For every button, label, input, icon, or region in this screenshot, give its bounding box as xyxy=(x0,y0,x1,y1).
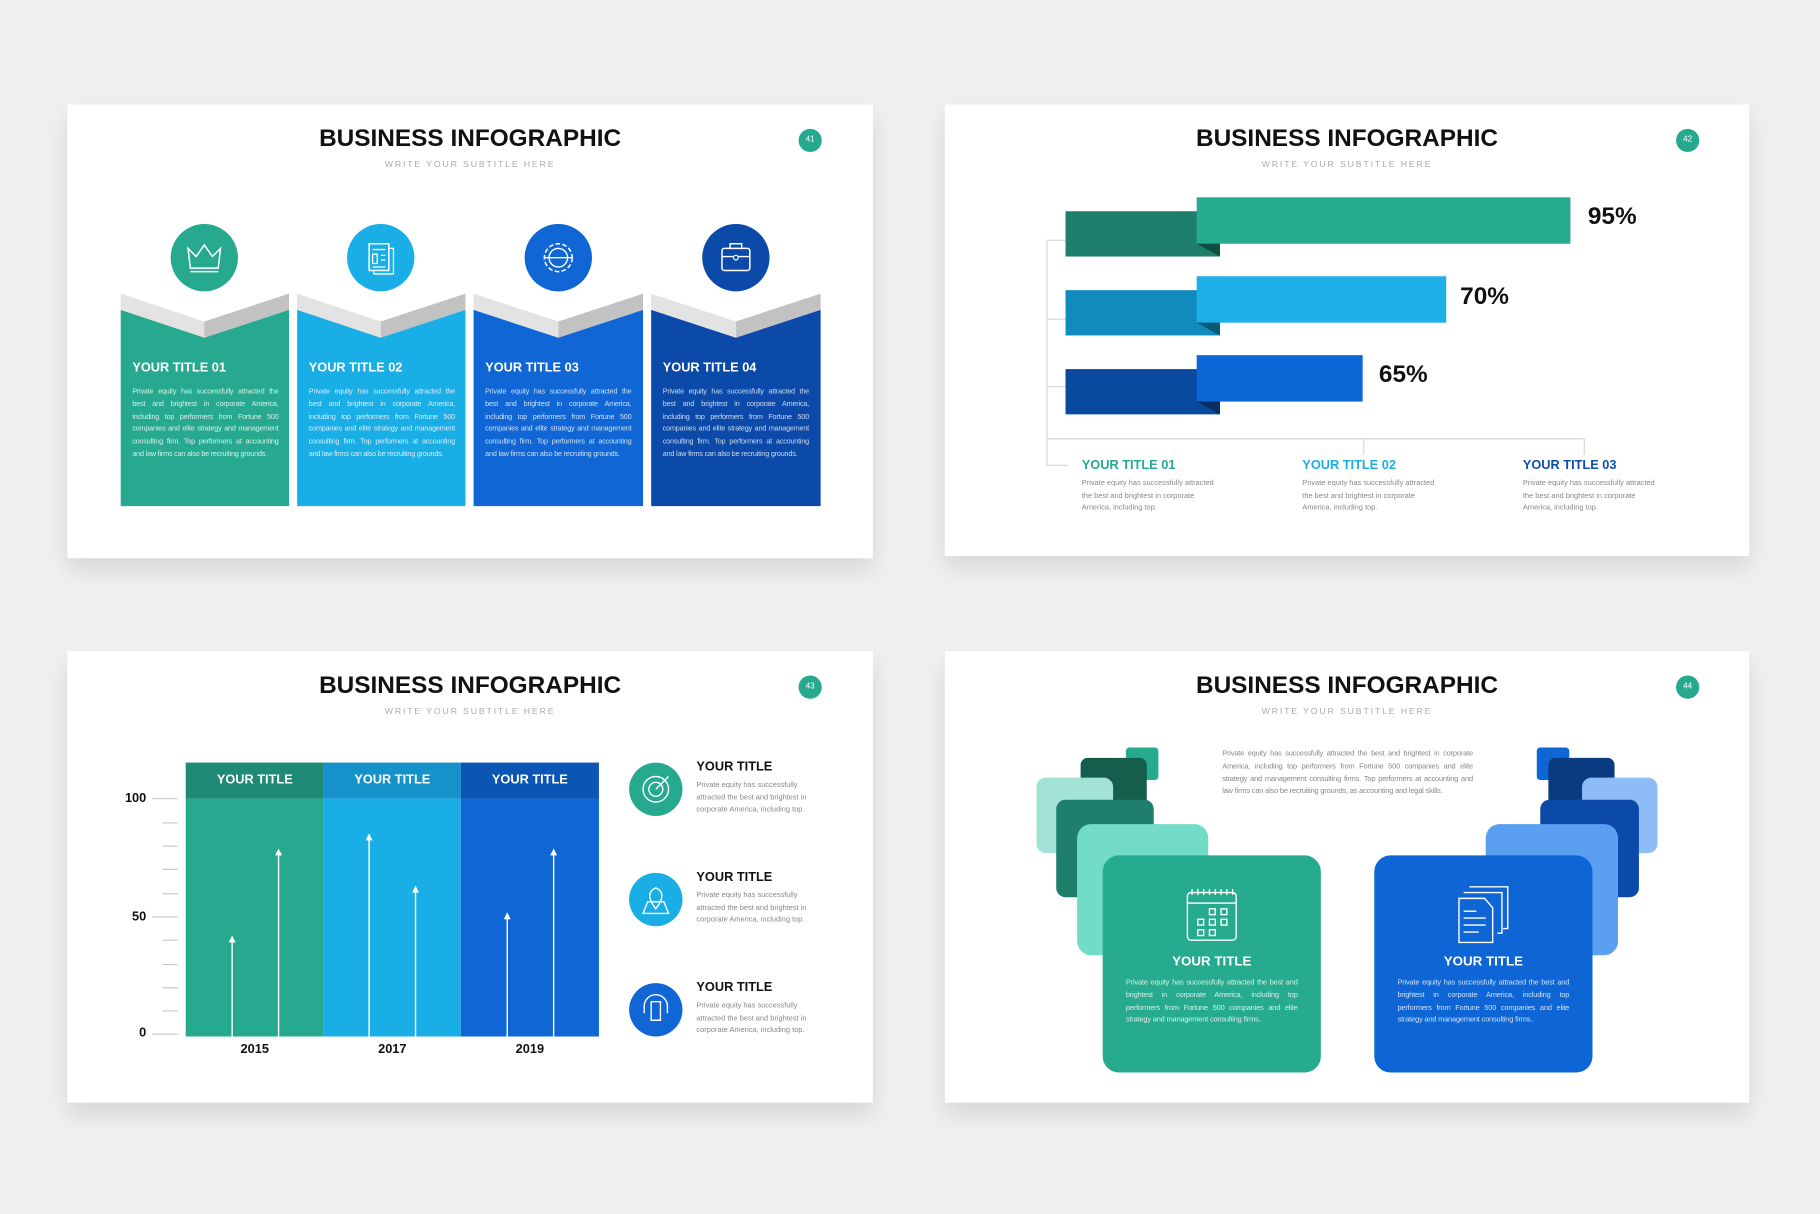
badge 44: 44 xyxy=(1683,682,1692,691)
axis labels: 0 xyxy=(139,1026,146,1040)
label 65: 65% xyxy=(1379,361,1428,388)
column 1 text: Private equity has successfully attracted the best and brightest in corporate America, including top performers from Fortune 500 companies and elite strategy and management consulting firm. Top performers at accounting and law firms can also be recruiting grounds. xyxy=(132,388,279,458)
legend item 3 xyxy=(1523,458,1655,512)
icon: headset xyxy=(629,983,682,1037)
icon: target xyxy=(629,763,682,816)
right card text xyxy=(1397,955,1570,1024)
legend item 1: YOUR TITLE 01 xyxy=(1082,458,1175,472)
icon: documents xyxy=(1459,887,1508,942)
header 3: YOUR TITLE xyxy=(492,773,568,787)
list item 2 xyxy=(696,871,807,924)
header 2: YOUR TITLE xyxy=(354,773,430,787)
icon: map pin xyxy=(629,873,682,926)
icon: calendar xyxy=(1187,889,1236,940)
axis labels: 100 xyxy=(125,792,146,806)
title: BUSINESS INFOGRAPHIC xyxy=(319,672,621,699)
right card text: YOUR TITLE xyxy=(1444,955,1523,969)
year labels: 2015 xyxy=(241,1042,269,1056)
column 2019 xyxy=(461,763,599,1037)
slide 4: stacked cards xyxy=(945,651,1749,1103)
column 3 text: Private equity has successfully attracted the best and brightest in corporate America, including top performers from Fortune 500 companies and elite strategy and management consulting firm. Top performers at accounting and law firms can also be recruiting grounds. xyxy=(485,388,631,458)
axis labels xyxy=(125,792,146,1040)
list item 3: YOUR TITLE xyxy=(696,981,772,995)
badge 42: 42 xyxy=(1683,136,1692,144)
left card text: YOUR TITLE xyxy=(1172,955,1251,969)
column 2 shape xyxy=(297,294,465,506)
list item 3 xyxy=(696,981,807,1034)
badge 43: 43 xyxy=(806,682,815,691)
badge 42 xyxy=(1676,129,1699,152)
column 2 text: Private equity has successfully attracted the best and brightest in corporate America, including top performers from Fortune 500 companies and elite strategy and management consulting firm. Top performers at accounting and law firms can also be recruiting grounds. xyxy=(309,388,455,458)
legend item 1 xyxy=(1082,458,1214,512)
icon: newspaper xyxy=(347,224,414,291)
badge 41 xyxy=(799,129,822,152)
legend item 2 xyxy=(1302,458,1434,512)
chart xyxy=(152,762,682,1036)
column 1 shape xyxy=(121,294,289,506)
subtitle: WRITE YOUR SUBTITLE HERE xyxy=(385,706,555,716)
badge 44 xyxy=(1676,676,1699,699)
label 70: 70% xyxy=(1460,283,1509,310)
right card text: Private equity has successfully attracted the best and brightest in corporate America, including top performers from Fortune 500 companies and elite strategy and management consulting firms.. xyxy=(1397,978,1569,1024)
bar 70% xyxy=(1066,276,1446,335)
column 3 shape xyxy=(474,294,643,506)
value labels: 95% xyxy=(1588,203,1637,230)
column 4 text: YOUR TITLE 04 xyxy=(663,361,756,375)
subtitle: WRITE YOUR SUBTITLE HERE xyxy=(1262,159,1432,169)
year labels: 2019 xyxy=(516,1042,544,1056)
title: BUSINESS INFOGRAPHIC xyxy=(1196,125,1498,152)
list item 2: Private equity has successfully attracted the best and brightest in corporate America, including top. xyxy=(696,891,807,924)
title: BUSINESS INFOGRAPHIC xyxy=(1196,672,1498,699)
card stack graphic xyxy=(1036,748,1658,1072)
intro paragraph: Private equity has successfully attracted the best and brightest in corporate America, including top performers from Fortune 500 companies and elite strategy and management consulting firms. Top performers at accounting and law firms can also be recruiting grounds, as accounting and legal skills. xyxy=(1222,750,1473,796)
legend item 2: Private equity has successfully attracted the best and brightest in corporate America, including top. xyxy=(1302,479,1434,512)
slide 1: four columns xyxy=(67,104,873,558)
list item 3: Private equity has successfully attracted the best and brightest in corporate America, including top. xyxy=(696,1002,807,1034)
list item 1: YOUR TITLE xyxy=(696,760,772,774)
icon: gear xyxy=(525,224,592,291)
legend item 2: YOUR TITLE 02 xyxy=(1302,458,1396,472)
column 3 text: YOUR TITLE 03 xyxy=(485,361,579,375)
column 4 shape xyxy=(651,294,821,506)
column 2 text: YOUR TITLE 02 xyxy=(309,361,402,375)
slide 3: column chart xyxy=(67,651,873,1103)
left stack xyxy=(1037,747,1321,1072)
list item 1 xyxy=(696,760,807,814)
column headers: YOUR TITLE xyxy=(217,773,293,787)
bar 65% xyxy=(1066,355,1363,414)
list item 2: YOUR TITLE xyxy=(696,871,772,884)
bar 95% xyxy=(1066,197,1570,257)
slide 2: bar chart xyxy=(945,104,1749,556)
icon: crown xyxy=(171,224,238,291)
legend item 3: Private equity has successfully attracted the best and brightest in corporate America, including top. xyxy=(1523,479,1655,512)
subtitle: WRITE YOUR SUBTITLE HERE xyxy=(1262,706,1432,716)
year labels: 2017 xyxy=(378,1042,407,1056)
list item 1: Private equity has successfully attracted the best and brightest in corporate America, including top. xyxy=(696,781,807,814)
legend item 1: Private equity has successfully attracted the best and brightest in corporate America, including top. xyxy=(1082,479,1214,512)
left card text xyxy=(1126,955,1298,1024)
legend item 3: YOUR TITLE 03 xyxy=(1523,458,1616,472)
icon: briefcase xyxy=(702,224,770,291)
subtitle: WRITE YOUR SUBTITLE HERE xyxy=(385,159,555,169)
year labels xyxy=(240,1042,544,1056)
bar chart xyxy=(1046,197,1585,466)
left card text: Private equity has successfully attracted the best and brightest in corporate America, including top performers from Fortune 500 companies and elite strategy and management consulting firms.. xyxy=(1126,978,1298,1024)
columns graphic xyxy=(120,224,821,506)
column 2017 xyxy=(324,763,461,1037)
right stack xyxy=(1374,747,1657,1072)
axis labels: 50 xyxy=(132,910,146,924)
column 4 text: Private equity has successfully attracted the best and brightest in corporate America, including top performers from Fortune 500 companies and elite strategy and management consulting firm. Top performers at accounting and law firms can also be recruiting grounds. xyxy=(663,388,809,458)
column 2015 xyxy=(186,763,324,1037)
badge 41: 41 xyxy=(806,136,815,144)
column 1 text: YOUR TITLE 01 xyxy=(132,361,226,375)
badge 43 xyxy=(799,676,822,699)
title: BUSINESS INFOGRAPHIC xyxy=(319,125,621,152)
